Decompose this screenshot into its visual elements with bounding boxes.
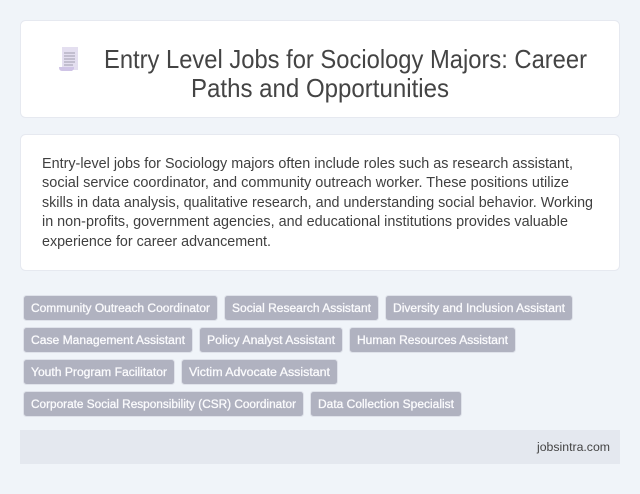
tag: Data Collection Specialist [310,392,462,416]
tag: Community Outreach Coordinator [24,296,218,320]
panel: title card [20,20,620,118]
title [104,46,587,103]
tag list [24,296,572,416]
title: Paths and Opportunities [191,75,449,103]
tag: Policy Analyst Assistant: Policy Analyst Assistant [207,333,336,347]
text block: description [42,156,593,250]
tag: Youth Program Facilitator: Youth Program Facilitator [31,365,167,379]
tag: Youth Program Facilitator [24,360,174,384]
tag: Community Outreach Coordinator: Community Outreach Coordinator [31,301,210,315]
tag: Case Management Assistant [24,328,192,352]
footer bar [20,430,620,464]
tag: Human Resources Assistant [350,328,516,352]
tag: Diversity and Inclusion Assistant: Diversity and Inclusion Assistant [393,301,566,315]
text block: description: in non-profits, government agencies, and educational institutions provides valuable [42,214,568,230]
panel: description [20,134,620,270]
tag: Diversity and Inclusion Assistant [386,296,572,320]
text block: description: social service coordinator, and community outreach worker. These positions utilize [42,175,569,191]
icon: document [59,47,78,71]
title: Entry Level Jobs for Sociology Majors: Career [104,46,587,74]
tag: Human Resources Assistant: Human Resources Assistant [357,333,509,347]
tag: Corporate Social Responsibility (CSR) Coordinator [24,392,304,416]
footer text: jobsintra.com [536,440,610,454]
tag: Data Collection Specialist: Data Collection Specialist [318,397,455,411]
tag: Victim Advocate Assistant: Victim Advocate Assistant [189,365,331,379]
tag: Social Research Assistant [224,296,378,320]
text block: description: skills in data analysis, qualitative research, and understanding social behavior. Working [42,195,593,211]
tag: Victim Advocate Assistant [182,360,338,384]
tag: Social Research Assistant: Social Research Assistant [232,301,372,315]
text block: description: Entry-level jobs for Sociology majors often include roles such as research assistant, [42,156,573,172]
text block: description: experience for career advancement. [42,234,271,250]
tag: Policy Analyst Assistant [200,328,342,352]
tag: Case Management Assistant: Case Management Assistant [31,333,186,347]
tag: Corporate Social Responsibility (CSR) Coordinator: Corporate Social Responsibility (CSR) Coordinator [31,397,296,411]
